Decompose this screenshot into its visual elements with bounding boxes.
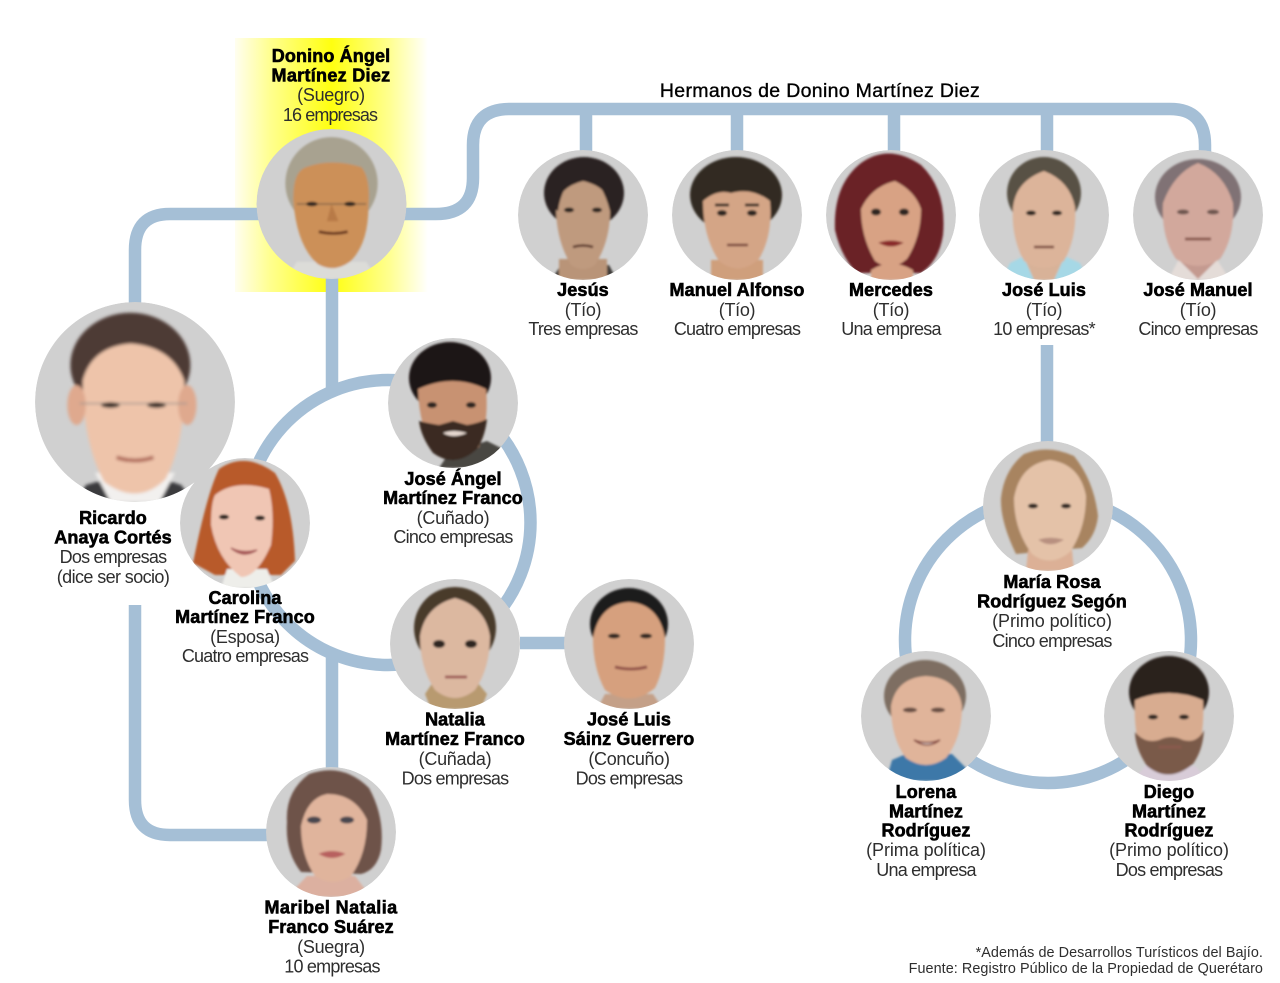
label: Ricardo: Anaya Cortés — [54, 528, 172, 548]
portrait: Jesús — [518, 150, 648, 280]
label: Diego: Martínez — [1132, 802, 1206, 822]
label: Manuel Alfonso — [669, 280, 805, 339]
label: José Luis: José Luis — [1002, 280, 1086, 300]
label: Natalia: Martínez Franco — [385, 729, 525, 749]
label: Carolina: Cuatro empresas — [182, 646, 309, 666]
label: José Luis: 10 empresas* — [993, 319, 1096, 339]
label: Sáinz: José Luis — [587, 710, 671, 730]
label: José Ángel: (Cuñado) — [417, 508, 489, 528]
label: Maribel: Franco Suárez — [268, 917, 394, 937]
label: José Ángel — [383, 468, 523, 547]
label: José Luis: (Tío) — [1026, 300, 1062, 320]
label: Diego: (Primo político) — [1109, 840, 1229, 860]
label: Carolina: Martínez Franco — [175, 607, 315, 627]
label: Natalia: Natalia — [425, 710, 486, 730]
label: Carolina: Carolina — [209, 588, 282, 608]
portrait: Diego Martínez Rodríguez — [1104, 651, 1234, 781]
label: Sáinz: (Concuño) — [588, 749, 670, 769]
label: Lorena — [866, 782, 986, 880]
label: María Rosa: Rodríguez Segón — [977, 592, 1127, 612]
label: Mercedes: Mercedes — [849, 280, 933, 300]
label: Jesús: Jesús — [557, 280, 609, 300]
portrait: Mercedes — [826, 150, 956, 280]
portrait: José Luis Sáinz Guerrero — [564, 579, 694, 709]
label: José Ángel: José Ángel — [404, 468, 502, 489]
label: José Manuel: Cinco empresas — [1138, 319, 1258, 339]
label: Lorena: Martínez — [889, 802, 963, 822]
label: Carolina: (Esposa) — [210, 627, 280, 647]
label: Donino: 16 empresas — [283, 105, 378, 125]
label: Natalia: Dos empresas — [402, 768, 509, 788]
portrait: Natalia Martínez Franco — [390, 579, 520, 709]
footnote and source: Fuente: Registro Público de la Propiedad de Querétaro — [909, 961, 1263, 977]
portrait: José Ángel Martínez Franco — [388, 338, 518, 468]
label: María Rosa: Cinco empresas — [992, 631, 1112, 651]
label: Maribel: Maribel Natalia — [264, 898, 398, 918]
label: Donino: (Suegro) — [297, 85, 365, 105]
label: Sáinz: Dos empresas — [576, 768, 683, 788]
label: Maribel: 10 empresas — [284, 956, 381, 976]
label: Sáinz — [564, 710, 694, 788]
portrait: José Luis — [979, 150, 1109, 280]
label: Ricardo — [54, 508, 172, 587]
label: Diego: Diego — [1144, 782, 1194, 802]
portrait: Donino Ángel Martínez Diez — [256, 129, 407, 279]
label: Diego — [1109, 782, 1229, 880]
label: Ricardo: Ricardo — [79, 508, 147, 528]
label: Lorena: (Prima política) — [866, 840, 986, 860]
label: Ricardo: Dos empresas — [60, 547, 167, 567]
label: Lorena: Lorena — [896, 782, 957, 802]
label: Manuel Alfonso: Manuel Alfonso — [669, 280, 805, 300]
label: Mercedes: Una empresa — [841, 319, 942, 339]
label: María Rosa: (Primo político) — [992, 611, 1112, 631]
label: Donino: Donino Ángel — [272, 45, 390, 66]
label: Lorena: Una empresa — [876, 860, 977, 880]
label: Manuel Alfonso: (Tío) — [719, 300, 755, 320]
label: Jesús: Tres empresas — [528, 319, 638, 339]
label: María Rosa — [977, 572, 1127, 651]
portrait: Ricardo Anaya Cortés — [35, 302, 235, 502]
portrait: Carolina Martínez Franco — [180, 458, 310, 588]
label: José Ángel: Martínez Franco — [383, 488, 523, 508]
portrait: José Manuel — [1133, 150, 1263, 280]
label: José Ángel: Cinco empresas — [393, 527, 513, 547]
label: Donino: Martínez Diez — [272, 66, 390, 86]
label: María Rosa: María Rosa — [1003, 572, 1101, 592]
label: Ricardo: (dice ser socio) — [57, 567, 169, 587]
label: José Luis — [993, 280, 1096, 339]
label: Diego: Rodríguez — [1124, 820, 1214, 840]
label: José Manuel: (Tío) — [1180, 300, 1216, 320]
label: Donino — [272, 45, 390, 125]
label: Carolina — [175, 588, 315, 666]
label: Maribel: (Suegra) — [297, 937, 365, 957]
footnote and source — [909, 945, 1263, 977]
label: Natalia — [385, 710, 525, 788]
label: Jesús — [528, 280, 638, 339]
label: Mercedes — [841, 280, 942, 339]
label: José Manuel: José Manuel — [1143, 280, 1253, 300]
portrait: Maribel Natalia Franco Suárez — [266, 767, 396, 897]
label: Sáinz: Sáinz Guerrero — [564, 729, 694, 749]
label: Lorena: Rodríguez — [881, 820, 971, 840]
heading: Hermanos: Hermanos de Donino Martínez Diez — [660, 80, 980, 102]
label: Mercedes: (Tío) — [873, 300, 909, 320]
highlight panel: Donino — [235, 38, 428, 292]
connector lines — [135, 109, 1205, 835]
label: Jesús: (Tío) — [565, 300, 601, 320]
footnote and source: *Además de Desarrollos Turísticos del Bajío. — [976, 945, 1263, 961]
label: José Manuel — [1138, 280, 1258, 339]
portrait: Manuel Alfonso — [672, 150, 802, 280]
portrait: María Rosa Rodríguez Segón — [983, 441, 1113, 571]
portrait: Lorena Martínez Rodríguez — [861, 651, 991, 781]
label: Maribel — [264, 898, 398, 976]
label: Manuel Alfonso: Cuatro empresas — [674, 319, 801, 339]
label: Natalia: (Cuñada) — [419, 749, 491, 769]
label: Diego: Dos empresas — [1116, 860, 1223, 880]
